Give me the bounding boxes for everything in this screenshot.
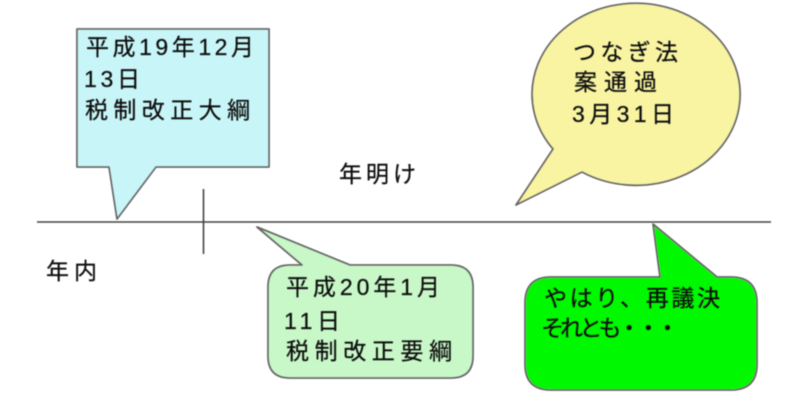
label: after new year: 年明け — [339, 161, 416, 187]
callout text: 13日 — [84, 66, 140, 92]
callout text: つなぎ法 — [573, 39, 678, 65]
timeline axis — [37, 221, 771, 223]
callout text: 11日 — [284, 308, 340, 334]
callout text: 案通過 — [574, 69, 657, 95]
callout: January 2008 tax outline — [257, 227, 473, 378]
callout: re-vote question — [525, 224, 757, 390]
callout text: 平成19年12月 — [86, 34, 254, 60]
callout text: 税制改正大綱 — [85, 97, 250, 123]
callout: Tsunagi bill passage — [516, 3, 740, 205]
label: within the year: 年内 — [46, 258, 97, 284]
callout text: 税制改正要綱 — [286, 338, 452, 364]
callout: December 2007 tax outline — [77, 29, 269, 219]
callout text: それとも・・・ — [541, 315, 679, 341]
callout text: 3月31日 — [572, 101, 674, 127]
year boundary tick — [202, 189, 204, 254]
callout text: 平成20年1月 — [286, 274, 440, 300]
callout text: やはり、再議決 — [544, 285, 720, 311]
